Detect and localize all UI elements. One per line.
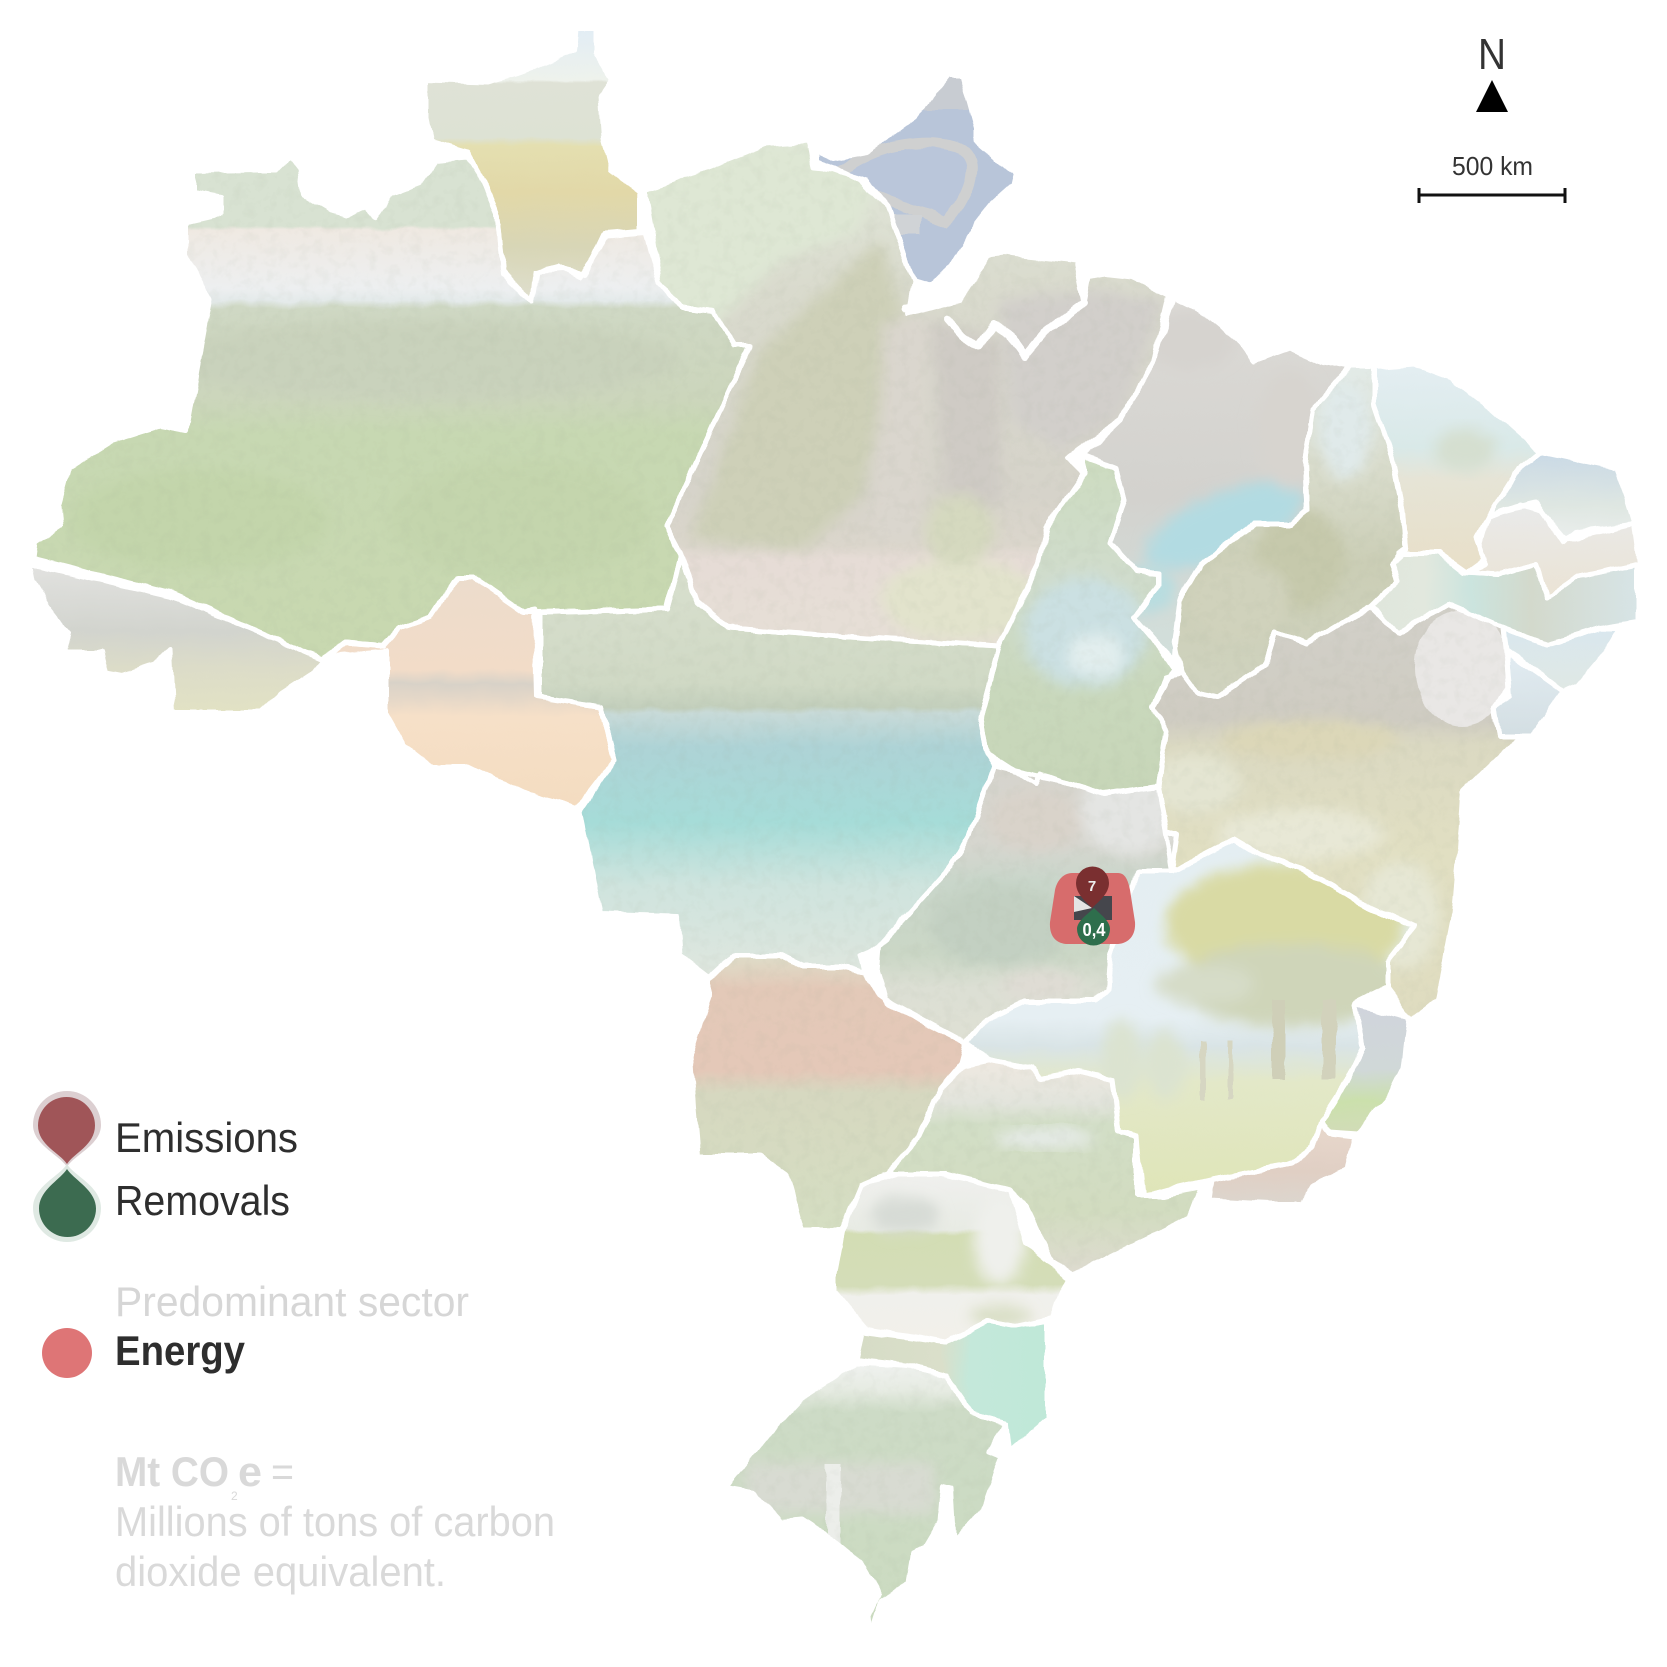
scale bar (1418, 151, 1566, 203)
state: Pernambuco (1371, 553, 1637, 644)
note: Mt CO2e definition: = (271, 1448, 294, 1495)
state: Amapa (816, 70, 1015, 287)
state: Rio Grande do Sul (725, 1363, 1007, 1635)
state: Rio de Janeiro (1209, 1124, 1355, 1204)
state: Parana (834, 1174, 1068, 1342)
state: Alagoas (1504, 628, 1621, 692)
state: Espirito Santo (1321, 1004, 1409, 1134)
state: Sao Paulo (887, 1060, 1201, 1275)
emissions drop: 7: 7 (1088, 878, 1096, 895)
state: Paraiba (1467, 505, 1640, 598)
state: Sergipe (1494, 652, 1563, 737)
state: Rondonia (324, 577, 614, 809)
removals drop: 0,4: 0,4 (1082, 920, 1106, 940)
note: Mt CO2e definition: Mt CO (115, 1448, 229, 1495)
state: Roraima (426, 29, 641, 301)
state: Tocantins (980, 457, 1174, 795)
state: Bahia (1150, 604, 1520, 1020)
data marker: energy sector with emissions and removals (1050, 866, 1135, 946)
state: Piaui (1174, 367, 1406, 697)
north arrow: N (1478, 30, 1506, 79)
note: Mt CO2e definition: 2 (231, 1489, 238, 1503)
state: Acre (29, 564, 325, 713)
state: Maranhao (1084, 298, 1350, 660)
legend: predominant sector: Energy (115, 1327, 246, 1374)
state: Ceara (1374, 364, 1541, 572)
scale bar: 500 km (1452, 151, 1533, 181)
note: Mt CO2e definition: Millions of tons of carbon (115, 1498, 555, 1545)
state: Mato Grosso do Sul (690, 956, 967, 1230)
state: Santa Catarina (855, 1321, 1047, 1451)
legend: emissions and removals: Removals (115, 1177, 290, 1224)
note: Mt CO2e definition: dioxide equivalent. (115, 1548, 446, 1595)
legend: emissions and removals (33, 1091, 298, 1242)
legend: predominant sector: Predominant sector (115, 1278, 469, 1325)
state: Minas Gerais (967, 839, 1414, 1196)
state: Para (640, 140, 1169, 646)
note: Mt CO2e definition: e (238, 1448, 262, 1495)
state: Mato Grosso (540, 558, 999, 978)
state: Rio Grande do Norte (1488, 452, 1635, 543)
legend: emissions and removals: Emissions (115, 1114, 298, 1161)
north arrow (1476, 30, 1508, 112)
legend: predominant sector (42, 1278, 469, 1378)
state: Amazonas (35, 157, 750, 660)
note: Mt CO2e definition (115, 1448, 555, 1595)
state: Goias (877, 765, 1180, 1044)
